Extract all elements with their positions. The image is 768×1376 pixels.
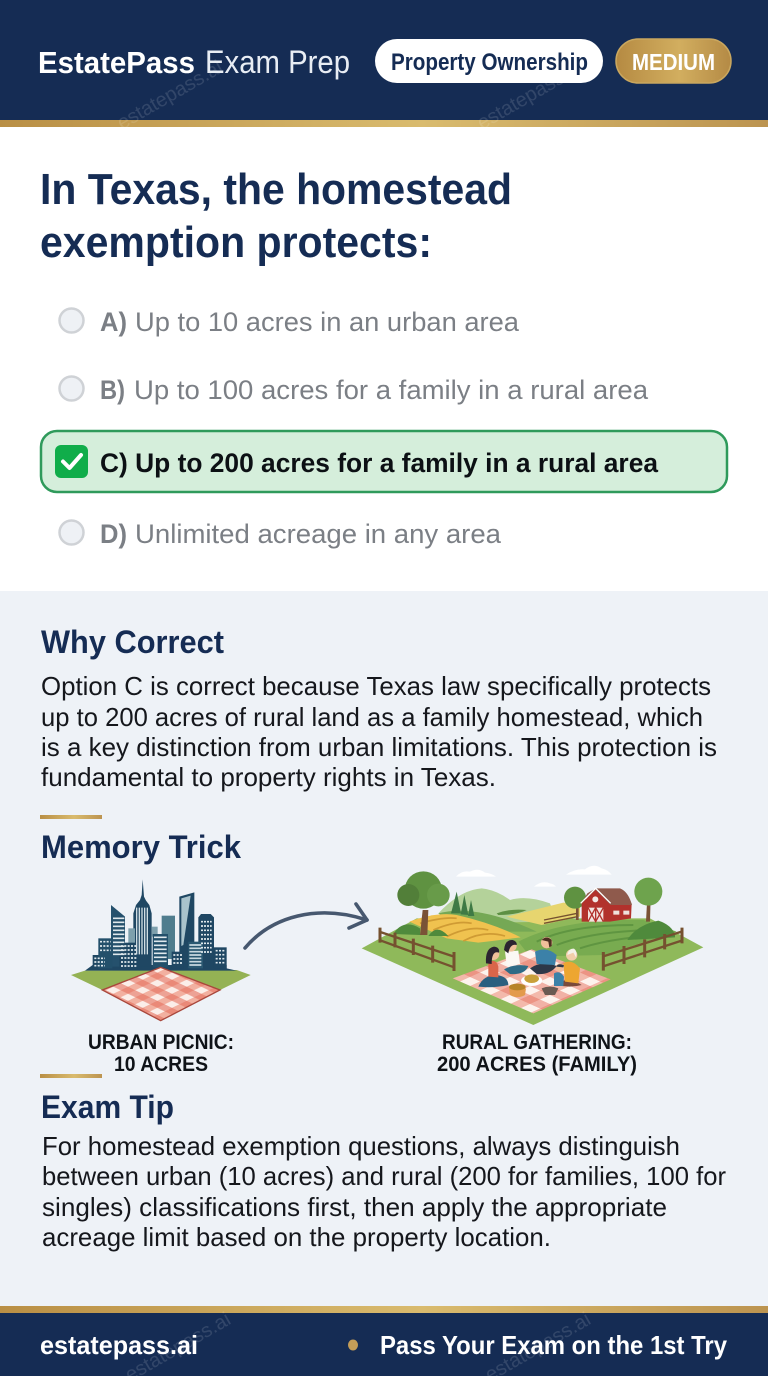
tree right (634, 878, 662, 922)
header band (0, 0, 768, 134)
picnic blanket (453, 949, 611, 1013)
difficulty pill: MEDIUM (632, 49, 715, 75)
panel: explanation (0, 591, 768, 1307)
text: why correct body (41, 671, 717, 792)
question heading: In Texas, the homestead (40, 165, 512, 214)
food (509, 974, 542, 997)
brand title (38, 44, 350, 80)
fences (379, 913, 682, 971)
text: why correct body: Option C is correct because Texas law specifically protects (41, 671, 711, 701)
header band: estatepass.ai (114, 56, 227, 134)
text: why correct body: up to 200 acres of rural land as a family homestead, which (41, 702, 703, 732)
brand title: EstatePass (38, 45, 195, 80)
difficulty pill (616, 39, 731, 83)
footer band (0, 1306, 768, 1376)
bushes (627, 921, 675, 940)
option C correct: C) Up to 200 acres for a family in a rural area (100, 448, 659, 478)
text: why correct body: fundamental to property rights in Texas. (41, 762, 496, 792)
text: exam tip body: between urban (10 acres) and rural (200 for families, 100 for (42, 1161, 726, 1191)
family (478, 937, 582, 997)
heading: memory trick: Memory Trick (41, 829, 241, 865)
text: exam tip body: acreage limit based on the property location. (42, 1222, 551, 1252)
label: rural: 200 ACRES (FAMILY) (437, 1053, 637, 1076)
clouds (456, 866, 612, 887)
icon: green check (55, 445, 88, 478)
brand title: Exam Prep (205, 44, 350, 80)
text: exam tip body (42, 1131, 726, 1252)
header band: estatepass.ai (474, 56, 587, 134)
answer options (41, 307, 727, 549)
rows (518, 920, 677, 957)
option B: Up to 100 acres for a family in a rural area (134, 375, 649, 405)
option C correct (41, 431, 727, 492)
text: why correct body: is a key distinction from urban limitations. This protection is (41, 732, 717, 762)
label: urban (88, 1031, 234, 1076)
question heading: exemption protects: (40, 218, 432, 267)
ground (362, 918, 703, 1025)
wheat field (409, 914, 521, 943)
person left (478, 947, 508, 987)
option A: Up to 10 acres in an urban area (135, 307, 520, 337)
child (542, 963, 564, 995)
option A: A) (100, 307, 127, 337)
tree left (393, 871, 450, 936)
option D: D) (100, 519, 127, 549)
heading: exam tip: Exam Tip (41, 1089, 174, 1125)
category pill (375, 39, 603, 83)
arrow: urban to rural (245, 904, 367, 948)
bullet dot (348, 1340, 358, 1350)
option B: B) (100, 375, 125, 405)
elder (557, 949, 582, 987)
illustration: urban picnic (71, 879, 251, 1021)
label: rural (437, 1031, 637, 1076)
conifers (451, 892, 474, 916)
text: exam tip body: singles) classifications first, then apply the appropriate (42, 1192, 667, 1222)
footer tagline: Pass Your Exam on the 1st Try (380, 1330, 727, 1360)
category pill: Property Ownership (391, 49, 588, 76)
text: exam tip body: For homestead exemption questions, always distinguish (42, 1131, 680, 1161)
illustration: rural gathering (362, 866, 703, 1025)
person centre right (530, 937, 557, 974)
heading: why correct: Why Correct (41, 624, 224, 660)
barn (581, 888, 632, 922)
person centre left (504, 940, 528, 974)
footer url: estatepass.ai (40, 1330, 198, 1360)
question heading (40, 165, 512, 267)
label: rural: RURAL GATHERING: (442, 1031, 632, 1054)
hills (438, 888, 557, 923)
label: urban: URBAN PICNIC: (88, 1031, 234, 1054)
tree mid (564, 887, 586, 920)
option D: Unlimited acreage in any area (135, 519, 502, 549)
label: urban: 10 ACRES (114, 1053, 208, 1076)
